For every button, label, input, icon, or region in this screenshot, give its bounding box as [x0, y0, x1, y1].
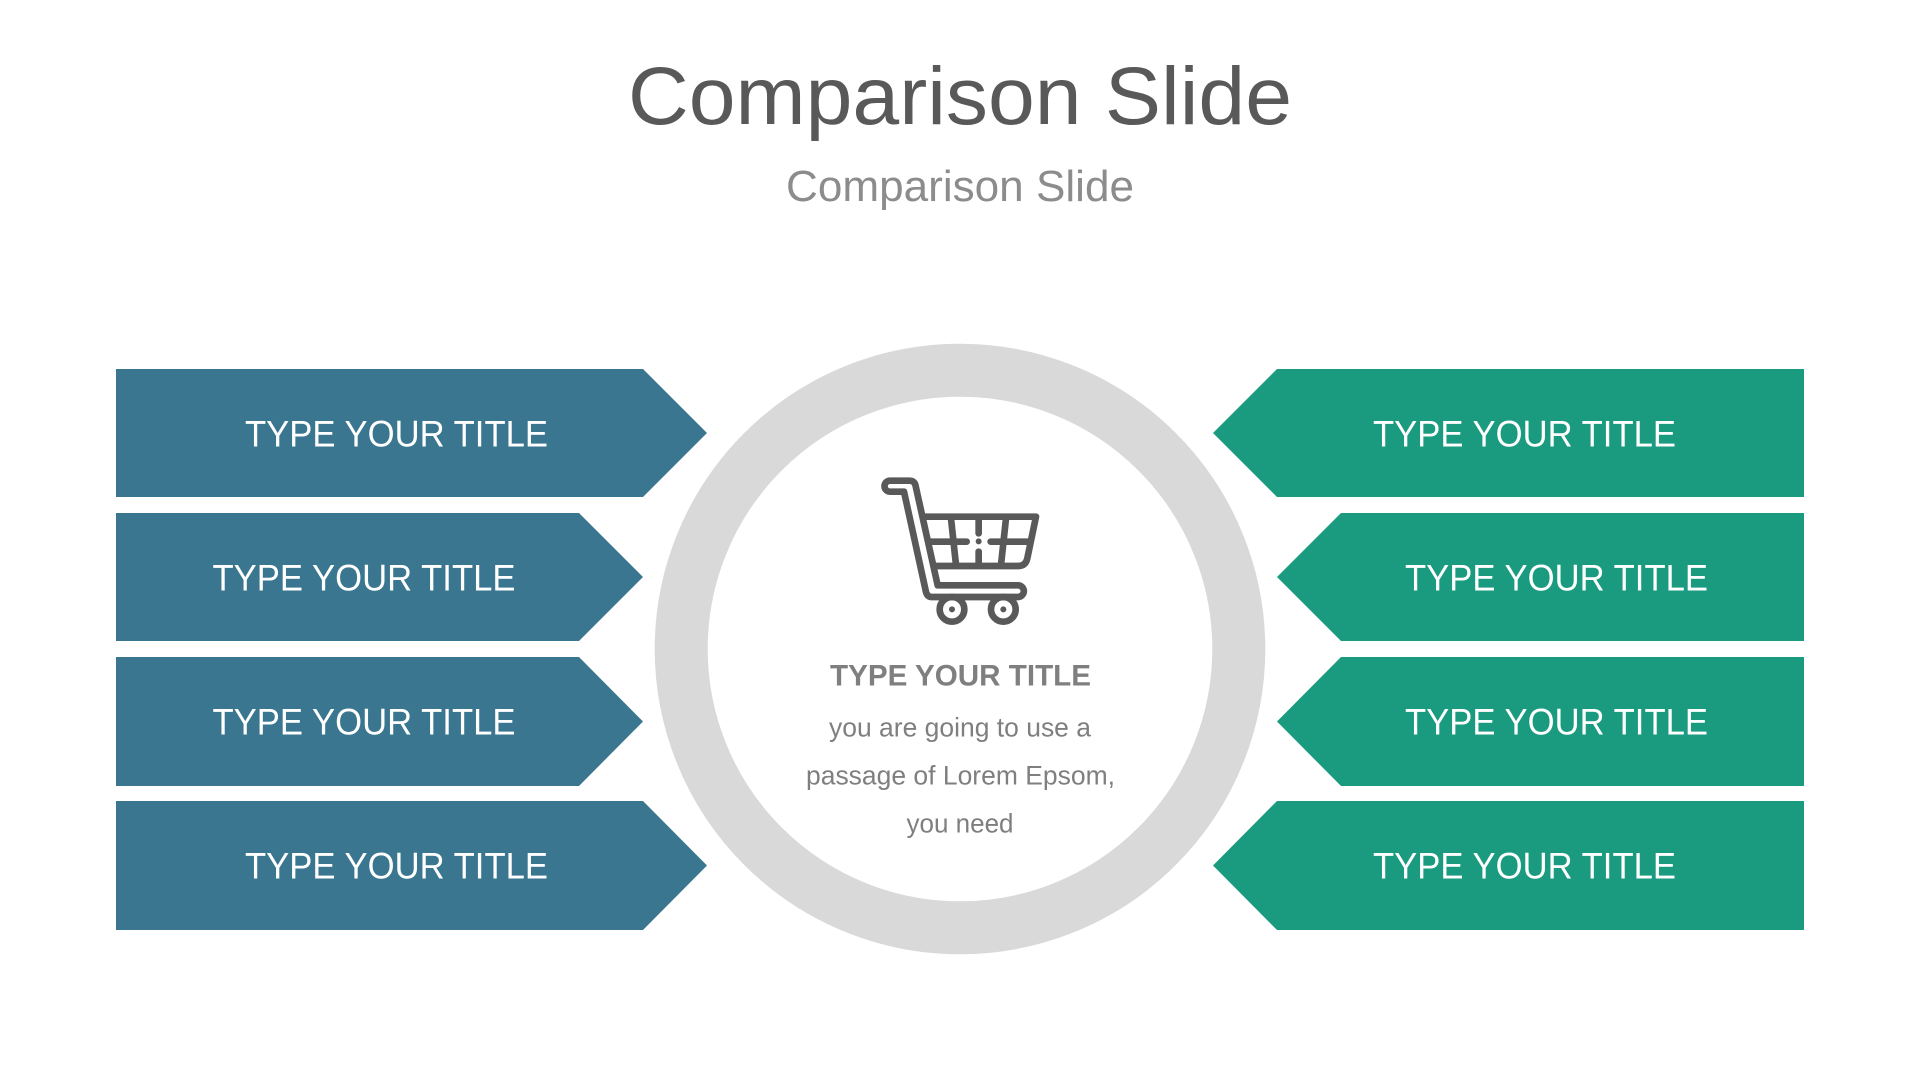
- right arrow 3: [1277, 657, 1804, 786]
- right arrow 3: TYPE YOUR TITLE: [1405, 702, 1708, 743]
- right arrow 1: [1213, 369, 1804, 497]
- left arrow 2: [116, 513, 643, 641]
- left arrow 4: [116, 801, 707, 930]
- left arrow 4: TYPE YOUR TITLE: [245, 846, 548, 887]
- left arrow 3: TYPE YOUR TITLE: [212, 702, 516, 743]
- center body text: [806, 712, 1115, 839]
- left arrow 1: [116, 369, 707, 497]
- right arrow 1: TYPE YOUR TITLE: [1373, 414, 1676, 455]
- center ring: [681, 370, 1239, 928]
- right arrow 4: [1213, 801, 1804, 930]
- center body text: you need: [906, 809, 1014, 839]
- center heading: TYPE YOUR TITLE: [830, 660, 1091, 693]
- left arrow 3: [116, 657, 643, 786]
- right arrow 2: TYPE YOUR TITLE: [1405, 558, 1708, 599]
- left arrow 1: TYPE YOUR TITLE: [245, 414, 548, 455]
- left arrow 2: TYPE YOUR TITLE: [212, 558, 516, 599]
- subtitle: Comparison Slide: [786, 162, 1134, 211]
- icon: shopping cart: [884, 481, 1036, 622]
- center body text: passage of Lorem Epsom,: [806, 760, 1115, 790]
- center body text: you are going to use a: [829, 712, 1092, 742]
- right arrow 2: [1277, 513, 1804, 641]
- title: Comparison Slide: [628, 51, 1292, 142]
- right arrow 4: TYPE YOUR TITLE: [1373, 846, 1676, 887]
